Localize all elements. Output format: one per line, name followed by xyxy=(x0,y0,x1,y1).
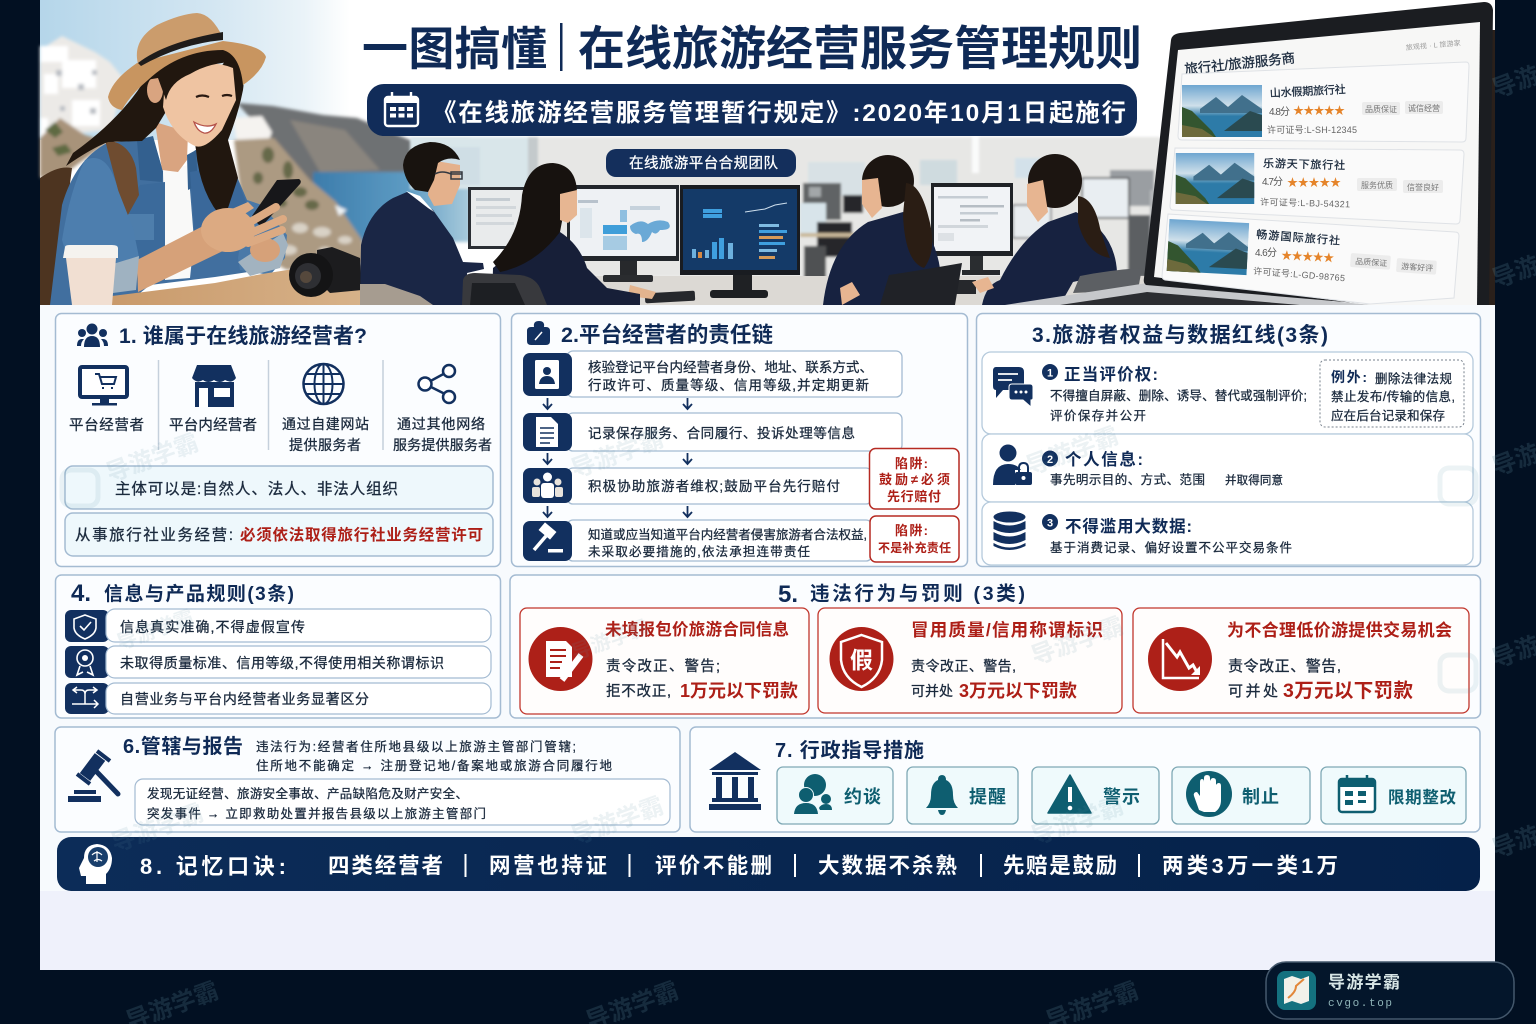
watermarks: 导游学霸 xyxy=(1023,422,1122,481)
icon: head with brain xyxy=(79,844,112,884)
penalty card 3: 3万元以下罚款 xyxy=(1283,680,1413,702)
agency card 1: 山水假期旅行社 xyxy=(1269,82,1346,100)
right 2: personal information: 个人信息: xyxy=(1065,449,1143,469)
woman with ponytail 1 xyxy=(823,155,962,305)
panel 4: information and product rules xyxy=(56,575,500,718)
right 2: personal information: 2 xyxy=(1047,454,1053,466)
icon: chat xyxy=(993,367,1033,407)
penalty card 3: 责令改正、警告, xyxy=(1228,658,1341,675)
step 1: verify xyxy=(523,351,902,397)
icon: contract xyxy=(528,627,592,691)
long hair over shoulder xyxy=(66,78,170,166)
agency card 1 xyxy=(1178,62,1469,142)
icon: database xyxy=(994,512,1026,550)
penalty card 1 xyxy=(520,608,809,714)
trap callout 1 xyxy=(870,448,959,509)
mnemonic phrases: 评价不能删 xyxy=(655,854,772,878)
forearm xyxy=(137,225,225,292)
icon: falling price xyxy=(1148,627,1212,691)
smile xyxy=(194,122,216,133)
eyes xyxy=(196,95,232,97)
hat brim xyxy=(108,41,266,110)
exception note: 删除法律法规 xyxy=(1375,371,1452,386)
exception note: 禁止发布/传输的信息, xyxy=(1331,389,1455,404)
ear xyxy=(147,77,163,103)
agency card 2: 4.7分 xyxy=(1262,176,1283,188)
step 1: verify: 核验登记平台内经营者身份、地址、联系方式、 xyxy=(588,360,873,375)
operator type: platform xyxy=(69,365,144,434)
penalty card 1: 未填报包价旅游合同信息 xyxy=(605,619,789,639)
penalty card 2: 责令改正、警告, xyxy=(911,658,1016,674)
penalty card 1: 拒不改正, xyxy=(606,683,671,700)
jurisdiction text: 住所地不能确定 → 注册登记地/备案地或旅游合同履行地 xyxy=(256,758,612,773)
panel 6: jurisdiction and reporting xyxy=(55,727,680,832)
screen heading: 旅行社/旅游服务商 xyxy=(1184,50,1296,77)
heading 5: 5. xyxy=(778,581,798,608)
measure: stop: 制止 xyxy=(1242,787,1279,807)
agency card 1: 4.8分 xyxy=(1269,106,1290,118)
panel 7: administrative guidance xyxy=(690,727,1480,832)
penalty card 2 xyxy=(818,608,1122,713)
reporting box xyxy=(135,779,670,825)
agency card 2: 信誉良好 xyxy=(1407,182,1439,192)
measure: stop xyxy=(1172,767,1310,824)
measure: warn: 警示 xyxy=(1103,787,1140,807)
office desks xyxy=(570,276,1160,305)
watermarks: 导游学霸 xyxy=(568,425,667,484)
icon: government building xyxy=(709,752,761,810)
team pill: 在线旅游平台合规团队 xyxy=(629,155,778,172)
operator type: on-platform merchant: 平台内经营者 xyxy=(169,417,257,434)
collar and placket xyxy=(137,136,198,190)
rule 2: 未取得质量标准、信用等级,不得使用相关称谓标识 xyxy=(120,655,444,671)
penalty card 2: 可并处 xyxy=(911,683,953,699)
agency card 1: 诚信经营 xyxy=(1408,103,1440,113)
right 1: fair reviews: 正当评价权: xyxy=(1064,365,1158,384)
right 1: fair reviews xyxy=(982,352,1473,434)
operator type: other network services: 通过其他网络 xyxy=(397,416,485,432)
photo: traveller with hat and phone xyxy=(40,13,385,305)
operator type: other network services xyxy=(393,365,492,453)
heading 4 xyxy=(71,580,294,607)
flow arrows c xyxy=(543,506,692,517)
hero banner xyxy=(40,0,1495,305)
exception note: 应在后台记录和保存 xyxy=(1331,408,1445,423)
effective date banner: 《在线旅游经营服务管理暂行规定》:2020年10月1日起施行 xyxy=(432,99,1126,127)
blank lower band xyxy=(40,891,1495,970)
rule 1: 信息真实准确,不得虚假宣传 xyxy=(120,619,305,635)
icon: fake shield xyxy=(830,627,894,691)
watermarks: 导游学霸 xyxy=(108,799,207,858)
heading 6: 6.管辖与报告 xyxy=(123,735,243,758)
laptop showing agency listing xyxy=(1005,2,1495,305)
step 2: record: 记录保存服务、合同履行、投诉处理等信息 xyxy=(588,425,855,441)
exception note: 例外: xyxy=(1331,369,1367,385)
mnemonic heading: 8. 记忆口诀: xyxy=(140,854,286,879)
step 4: joint liability: 知道或应当知道平台内经营者侵害旅游者合法权益, xyxy=(588,527,867,542)
penalty card 1: 责令改正、警告; xyxy=(606,658,720,675)
screen top-right caption: 旅观视 · L 旅游家 xyxy=(1405,38,1461,52)
team pill xyxy=(606,149,796,177)
rule 1 xyxy=(65,609,491,642)
penalty card 3: 可并处 xyxy=(1228,683,1278,700)
content sheet xyxy=(40,305,1495,891)
agency card 3: 品质保证 xyxy=(1355,256,1387,268)
step 3: assist xyxy=(523,468,872,504)
measure: deadline rectification: 限期整改 xyxy=(1388,788,1456,807)
measure: warn xyxy=(1032,767,1159,824)
icon: people xyxy=(77,324,108,347)
monitor 3 dashboard xyxy=(680,185,800,298)
woman with ponytail 2 xyxy=(972,154,1142,305)
agency card 2 xyxy=(1170,148,1464,224)
panel 1: who are operators xyxy=(56,314,500,566)
right 2: personal information: 事先明示目的、方式、范围 xyxy=(1050,472,1205,487)
heading 2: 2.平台经营者的责任链 xyxy=(561,322,773,347)
operator type: platform: 平台经营者 xyxy=(69,417,144,434)
operator type: other network services: 服务提供服务者 xyxy=(393,437,492,453)
agency card 3: 畅游国际旅行社 xyxy=(1256,227,1341,248)
icon: map logo xyxy=(1277,971,1316,1010)
licence box xyxy=(65,513,493,556)
title: 一图搞懂 xyxy=(362,23,547,75)
reporting box: 突发事件 → 立即救助处置并报告县级以上旅游主管部门 xyxy=(147,806,486,821)
subject box: 主体可以是:自然人、法人、非法人组织 xyxy=(115,480,398,498)
rule 3: 自营业务与平台内经营者业务显著区分 xyxy=(120,691,369,707)
heading 4: 4. xyxy=(71,580,91,607)
subject box xyxy=(65,466,493,509)
operator type: own website: 提供服务者 xyxy=(289,437,361,453)
white shirt xyxy=(163,165,194,280)
icon: gavel xyxy=(68,751,118,802)
step 4: joint liability: 未采取必要措施的,依法承担连带责任 xyxy=(588,544,810,559)
icon: person with lock xyxy=(993,444,1032,485)
agency card 3: 4.6分 xyxy=(1255,247,1277,259)
rule 3 xyxy=(65,683,491,714)
watermarks xyxy=(62,422,1476,858)
heading 1: 1. 谁属于在线旅游经营者? xyxy=(119,325,367,348)
title: 在线旅游经营服务管理规则 xyxy=(578,22,1142,75)
right sleeve xyxy=(238,200,287,275)
footer logo badge: cvgo.top xyxy=(1328,998,1392,1010)
watermarks: 导游学霸 xyxy=(569,615,652,665)
jurisdiction text: 违法行为:经营者住所地县级以上旅游主管部门管辖; xyxy=(256,739,576,754)
penalty card 2: 冒用质量/信用称谓标识 xyxy=(911,620,1103,640)
reporting box: 发现无证经营、旅游安全事故、产品缺陷危及财产安全、 xyxy=(147,786,468,801)
right 3: big data: 基于消费记录、偏好设置不公平交易条件 xyxy=(1050,540,1292,555)
top hair xyxy=(146,46,236,100)
right 2: personal information: 并取得同意 xyxy=(1225,473,1283,487)
right 1: fair reviews: 1 xyxy=(1047,368,1053,380)
table xyxy=(112,268,385,305)
agency card 1: 许可证号:L-SH-12345 xyxy=(1267,124,1357,135)
monitor 1 xyxy=(468,187,524,249)
trap callout 1: 鼓励≠必须 xyxy=(879,472,950,487)
camera xyxy=(289,247,362,297)
agency card 3 xyxy=(1162,214,1459,304)
agency card 1: 品质保证 xyxy=(1365,104,1397,114)
watermarks: 导游学霸 xyxy=(568,792,667,851)
scene: coastal backdrop xyxy=(40,0,470,270)
monitor 2 with map xyxy=(567,185,679,282)
panel 2: platform responsibility chain xyxy=(512,314,968,566)
measure: remind: 提醒 xyxy=(969,786,1006,807)
scene: office backdrop xyxy=(410,137,1160,282)
mnemonic phrases: 大数据不杀熟 xyxy=(818,853,957,878)
footer logo badge: 导游学霸 xyxy=(1328,972,1400,992)
watermarks: 导游学霸 xyxy=(1028,792,1127,851)
right 1: fair reviews: 评价保存并公开 xyxy=(1050,409,1146,423)
trap callout 2: 不是补充责任 xyxy=(878,540,951,555)
flow arrows a xyxy=(543,398,692,409)
mnemonic phrases: 先赔是鼓励 xyxy=(1003,854,1117,878)
trap callout 2: 陷阱: xyxy=(895,523,928,538)
coffee cup xyxy=(63,245,118,305)
backpack xyxy=(40,167,72,305)
measure: talk xyxy=(777,767,893,824)
icon: lock tag xyxy=(527,321,550,345)
hat band xyxy=(138,32,223,66)
licence box: 从事旅行社业务经营: xyxy=(75,526,233,544)
step 3: assist: 积极协助旅游者维权;鼓励平台先行赔付 xyxy=(588,478,840,494)
measure: remind xyxy=(907,767,1018,824)
backpack strap xyxy=(105,140,139,222)
woman at monitor 2 xyxy=(462,163,640,305)
neck xyxy=(155,122,188,172)
photo: compliance team at monitors xyxy=(360,142,1142,305)
agency card 2: 服务优质 xyxy=(1361,180,1393,190)
penalty card 3 xyxy=(1133,608,1469,713)
exception note xyxy=(1320,360,1464,427)
agency card 3: 许可证号:L-GD-98765 xyxy=(1253,265,1345,283)
heading 3: 3.旅游者权益与数据红线(3条) xyxy=(1032,324,1328,347)
watermarks: 导游学霸 xyxy=(103,429,202,488)
flow arrows b xyxy=(543,453,692,464)
face xyxy=(163,64,236,147)
agency card 2: 乐游天下旅行社 xyxy=(1263,156,1345,172)
heading 7: 7. 行政指导措施 xyxy=(775,739,924,762)
effective date banner xyxy=(367,84,1137,136)
watermarks: 导游学霸 xyxy=(1028,612,1127,671)
keyboards and hands xyxy=(628,280,976,303)
panel 5: violations and penalties xyxy=(510,575,1480,718)
right 3: big data: 3 xyxy=(1047,518,1053,530)
step 2: record xyxy=(523,413,902,451)
operator type: on-platform merchant xyxy=(169,365,257,434)
operator type: own website xyxy=(282,364,369,453)
trap callout 1: 先行赔付 xyxy=(887,489,941,504)
step 1: verify: 行政许可、质量等级、信用等级,并定期更新 xyxy=(588,377,869,393)
rolled cuff xyxy=(113,256,139,293)
rule 2 xyxy=(65,646,491,678)
mnemonic phrases: 四类经营者 xyxy=(328,854,443,878)
mnemonic phrases xyxy=(328,853,1338,878)
trap callout 1: 陷阱: xyxy=(895,456,928,471)
mnemonic phrases: 两类3万一类1万 xyxy=(1162,854,1338,878)
right 3: big data xyxy=(982,502,1473,565)
measure: talk: 约谈 xyxy=(844,787,881,807)
agency card 3: ★★★★★ xyxy=(1281,250,1334,265)
hat crown xyxy=(137,13,223,64)
penalty card 3: 为不合理低价游提供交易机会 xyxy=(1227,620,1452,640)
panel 8: memory mnemonic bar xyxy=(57,837,1480,891)
heading 4: 信息与产品规则(3条) xyxy=(104,582,294,605)
heading 5: 违法行为与罚则 (3类) xyxy=(810,583,1025,605)
jurisdiction text xyxy=(256,739,612,773)
icon: fake shield: 假 xyxy=(850,647,873,673)
right 1: fair reviews: 不得擅自屏蔽、删除、诱导、替代或强制评价; xyxy=(1050,388,1307,403)
licence box: 必须依法取得旅行社业务经营许可 xyxy=(240,525,483,544)
agency card 3: 游客好评 xyxy=(1401,261,1433,273)
agency card 2: 许可证号:L-BJ-54321 xyxy=(1260,196,1350,209)
right hair xyxy=(190,50,244,220)
right 2: personal information xyxy=(982,434,1473,502)
man in suit xyxy=(360,142,484,305)
agency card 1: ★★★★★ xyxy=(1293,105,1345,117)
trap callout 2 xyxy=(870,516,959,562)
phone xyxy=(252,179,301,226)
mnemonic phrases: 网营也持证 xyxy=(489,854,607,878)
left sleeve xyxy=(62,158,140,292)
footer logo badge xyxy=(1266,962,1514,1019)
monitor 4 xyxy=(931,183,1013,275)
right 3: big data: 不得滥用大数据: xyxy=(1065,516,1192,536)
icon: calendar xyxy=(385,92,418,126)
beige seat xyxy=(360,284,433,305)
step 4: joint liability xyxy=(523,520,872,561)
penalty card 1: 1万元以下罚款 xyxy=(680,681,798,701)
agency card 2: ★★★★★ xyxy=(1287,177,1341,189)
hand xyxy=(201,202,255,252)
operator type: own website: 通过自建网站 xyxy=(282,416,369,432)
measure: deadline rectification xyxy=(1321,767,1466,824)
panel 3: traveller rights and data red lines xyxy=(976,314,1480,566)
jacket xyxy=(50,138,262,305)
penalty card 2: 3万元以下罚款 xyxy=(959,681,1077,701)
watermarks: 导游学霸 xyxy=(114,605,197,655)
